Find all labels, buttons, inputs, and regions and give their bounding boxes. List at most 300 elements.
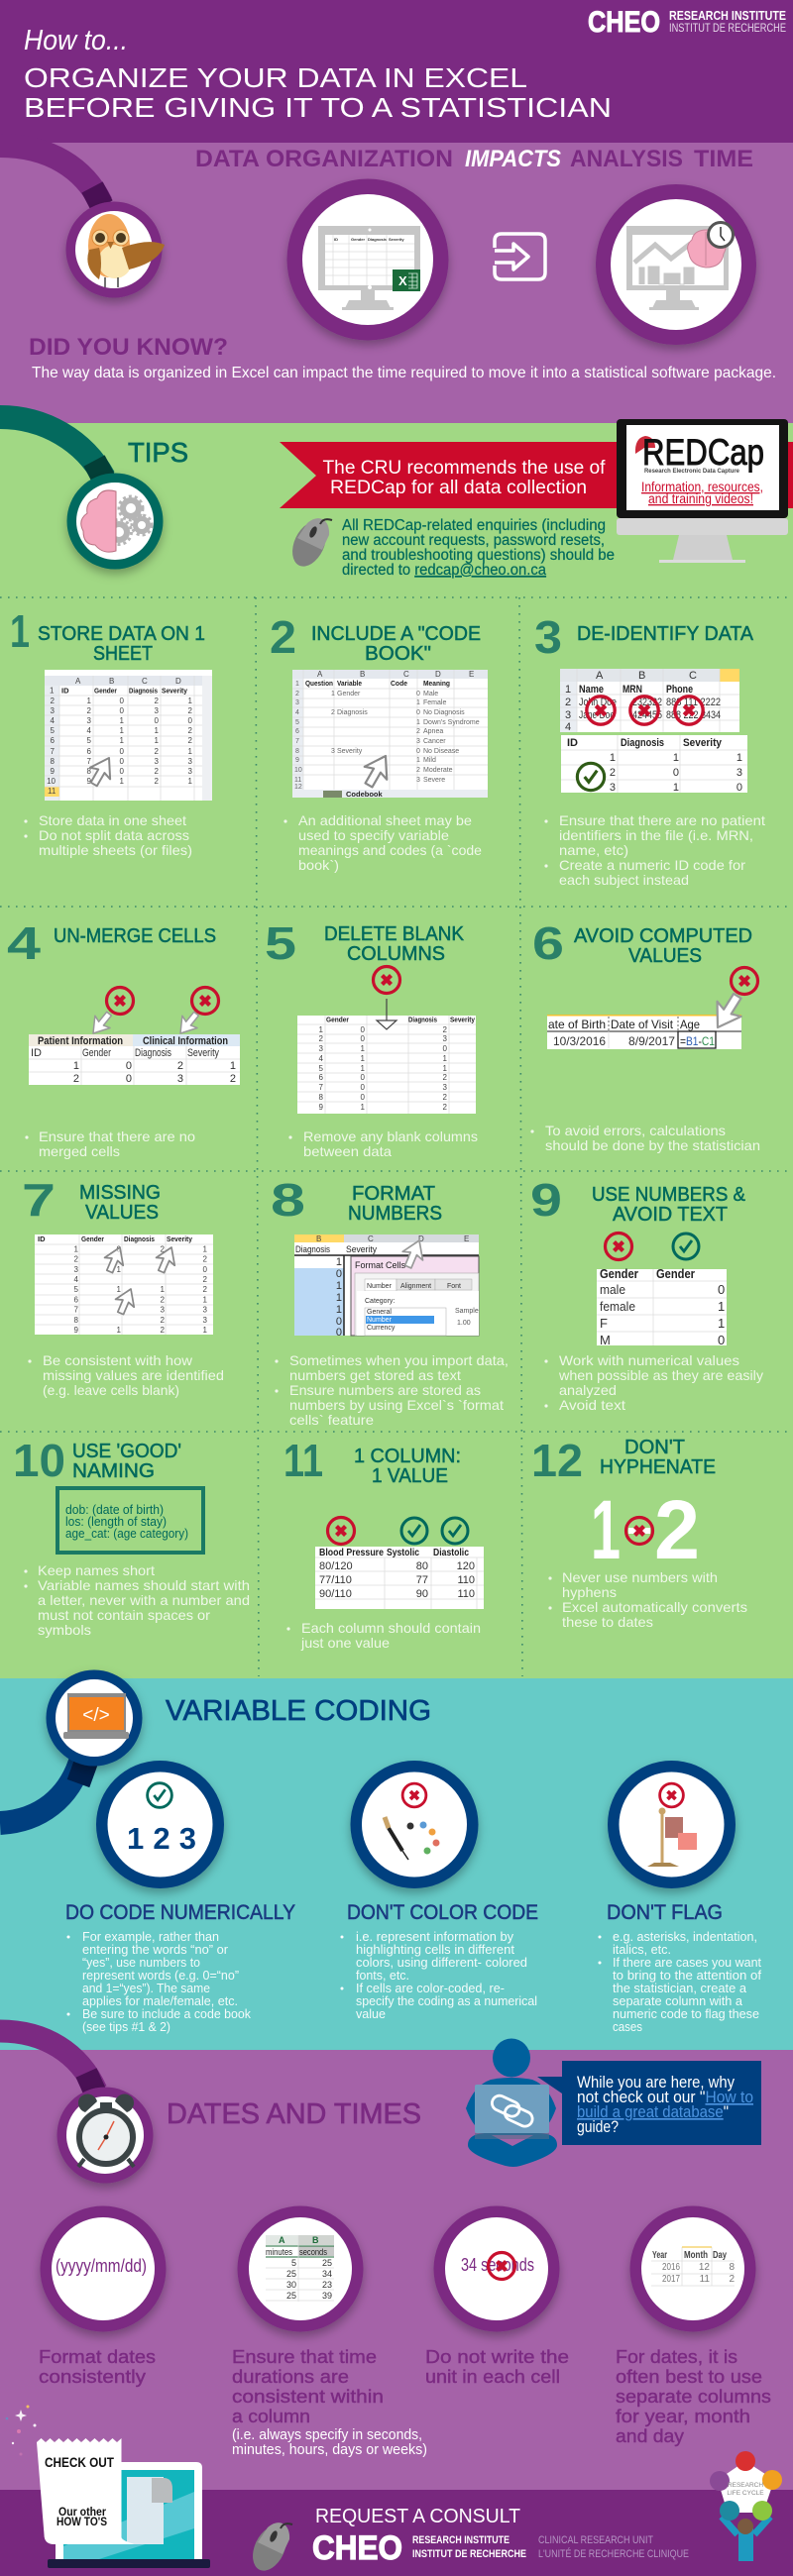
- bullet list: value: [356, 2006, 386, 2021]
- heading: NAMING: [72, 1459, 155, 1482]
- icon: circle minutes and seconds table: 34: [322, 2269, 332, 2279]
- bullet list: [599, 1929, 761, 2034]
- heading: BOOK": [365, 642, 431, 665]
- icon: circle minutes and seconds table: B: [312, 2235, 319, 2245]
- bullet list: Never use numbers with: [562, 1569, 718, 1585]
- number 9: 9: [530, 1174, 562, 1226]
- code book screenshot: 3: [295, 699, 299, 706]
- text: do not write the unit: [425, 2346, 569, 2387]
- text versus number table: 0: [718, 1333, 725, 1347]
- heading: [324, 922, 464, 965]
- bullet list: fonts, etc.: [356, 1968, 409, 1983]
- bullet list: Excel automatically converts: [562, 1599, 747, 1615]
- de-identified data table: Diagnosis: [621, 737, 664, 749]
- code book screenshot: Gender: [337, 691, 361, 698]
- panel: tip 8 format numbers: [271, 1174, 509, 1428]
- text: time durations: minutes, hours, days or weeks): [232, 2441, 427, 2458]
- text: format dates consistently: [39, 2346, 156, 2387]
- logo: footer CHEO and clinical research unit: RESEARCH INSTITUTE: [412, 2534, 510, 2546]
- icon: circle with monitor showing spreadsheet: [287, 178, 448, 341]
- code book screenshot: 2: [416, 728, 420, 735]
- table with missing values: Gender: [81, 1234, 104, 1243]
- code book screenshot: 7: [295, 738, 299, 745]
- bullet list: Ensure that there are no: [39, 1128, 195, 1144]
- format cells screenshot: 0: [336, 1268, 342, 1280]
- callout: database guide: not check out our "How to: [577, 2089, 753, 2106]
- table with blank column: Gender: [326, 1015, 349, 1024]
- code book screenshot: 1: [416, 719, 420, 726]
- text versus number table: female: [600, 1299, 635, 1314]
- code book screenshot: Cancer: [423, 738, 446, 745]
- column: don't color code: [341, 1901, 538, 2021]
- blood pressure table: 80: [416, 1560, 428, 1572]
- blood pressure table: 90/110: [319, 1588, 352, 1600]
- bullet list: the statistician, create a: [613, 1981, 747, 1995]
- heading: [354, 1445, 461, 1487]
- spreadsheet screenshot: 98023: [51, 767, 193, 776]
- bullet list: i.e. represent information by: [356, 1929, 513, 1944]
- panel: tip 3 de-identify data: [534, 611, 765, 888]
- icon: circle minutes and seconds table: 25: [286, 2269, 296, 2279]
- icon: laptop with check out how-to's scroll: CHECK OUT: [45, 2454, 114, 2470]
- icon: magnifier with brain and gears: [0, 417, 163, 569]
- heading: [79, 1181, 161, 1224]
- bullet list: italics, etc.: [613, 1942, 671, 1957]
- icon: monitor with REDCap link: Research Electronic Data Capture: [644, 468, 739, 475]
- header band: [0, 0, 793, 143]
- bullet list: If cells are color-coded, re-: [356, 1981, 505, 1995]
- blood pressure table: 80/120: [319, 1560, 353, 1572]
- icon: circle minutes and seconds table: 30: [286, 2280, 296, 2290]
- bullet list: [548, 1569, 747, 1630]
- identifiable data table: Name: [579, 684, 604, 696]
- spreadsheet screenshot: 9: [87, 777, 92, 786]
- icon: circle do code numerically: 1 2 3: [127, 1821, 196, 1856]
- text versus number table: F: [600, 1316, 608, 1331]
- icon: circle minutes and seconds table: [238, 2205, 363, 2332]
- table with missing values: 823: [74, 1316, 208, 1325]
- table with blank column: 511: [319, 1064, 448, 1073]
- code book screenshot: 6: [295, 728, 299, 735]
- text: separate columns for dates: for year, month: [616, 2406, 750, 2426]
- panel: tip 6 avoid computed values: [530, 917, 760, 1153]
- table with missing values: Severity: [167, 1234, 193, 1243]
- table with blank column: 602: [319, 1073, 448, 1082]
- code book screenshot: 8: [295, 748, 299, 755]
- bullet list: For example, rather than: [82, 1929, 219, 1944]
- callout: database guide: While you are here, why: [577, 2074, 736, 2092]
- code book screenshot: C: [403, 670, 409, 679]
- bullet list: [24, 812, 192, 858]
- logo: footer CHEO and clinical research unit: CLINICAL RESEARCH UNIT: [538, 2534, 653, 2546]
- logo: CHEO research institute: [588, 6, 786, 39]
- bullet list: Do not split data across: [39, 827, 189, 843]
- heading: variable coding: VARIABLE CODING: [166, 1695, 431, 1727]
- bullet list: must not contain spaces or: [38, 1607, 210, 1623]
- icon: computer mouse: [246, 2521, 293, 2576]
- column: don't flag: [599, 1901, 761, 2034]
- formula table: 8/9/2017: [628, 1034, 675, 1048]
- banner: CRU recommendation: REDCap for all data collection: [330, 478, 587, 498]
- bullet list: represent words (e.g. 0=“no”: [82, 1968, 239, 1983]
- code book screenshot: Codebook: [346, 790, 383, 799]
- formula table: 10/3/2016: [553, 1034, 606, 1048]
- panel: tip 7 missing values: [22, 1174, 224, 1398]
- text: time durations: Ensure that time: [232, 2346, 377, 2367]
- format cells screenshot: Category:: [365, 1298, 395, 1305]
- icon: circle minutes and seconds table: 25: [322, 2258, 332, 2268]
- heading: AVOID TEXT: [613, 1203, 728, 1226]
- icon: circle minutes and seconds table: A: [279, 2235, 285, 2245]
- text: time durations: [232, 2346, 427, 2458]
- bullet list: Ensure numbers are stored as: [289, 1382, 481, 1398]
- code book screenshot: 1: [416, 699, 420, 706]
- table with missing values: Diagnosis: [124, 1234, 155, 1243]
- panel background: did you know: [0, 143, 793, 423]
- heading: data organization impacts analysis time: IMPACTS: [465, 146, 561, 172]
- blood pressure table: 120: [457, 1560, 475, 1572]
- bullet list: numbers by using Excel`s `format: [289, 1397, 504, 1413]
- title: ORGANIZE YOUR DATA IN EXCEL: [24, 62, 527, 93]
- bullet list: Store data in one sheet: [39, 812, 186, 828]
- code book screenshot: 0: [416, 748, 420, 755]
- code book screenshot: Down's Syndrome: [423, 719, 480, 726]
- bullet list: To avoid errors, calculations: [545, 1123, 726, 1138]
- banner: CRU recommendation: The CRU recommends the use of: [323, 458, 606, 479]
- code book screenshot: Female: [423, 699, 446, 706]
- heading: DE-IDENTIFY DATA: [577, 622, 753, 645]
- text: REDCap enquiries: [342, 517, 615, 579]
- number 12: 12: [531, 1435, 583, 1486]
- table with missing values: [35, 1234, 213, 1335]
- format cells screenshot: [294, 1234, 479, 1339]
- panel: tip 10 use good naming: [13, 1435, 250, 1638]
- spreadsheet screenshot: 2: [155, 777, 160, 786]
- spreadsheet screenshot: 11: [48, 787, 57, 796]
- bullet list: each subject instead: [559, 872, 689, 888]
- format cells screenshot: 1: [336, 1256, 342, 1268]
- formula table: ate of Birth: [548, 1018, 606, 1031]
- bullet list: An additional sheet may be: [298, 812, 472, 828]
- format cells screenshot: 1: [336, 1280, 342, 1292]
- heading: [38, 622, 205, 665]
- heading: INCLUDE A "CODE: [311, 622, 481, 645]
- heading: VALUES: [85, 1201, 159, 1224]
- icon: research life cycle: RESEARCH: [728, 2482, 763, 2489]
- identifiable data table: A: [596, 670, 604, 682]
- bullet list: applies for male/female, etc.: [82, 1993, 238, 2008]
- merged cell table with warnings: Clinical Information: [143, 1035, 228, 1047]
- text: format dates consistently: consistently: [39, 2366, 147, 2387]
- spreadsheet screenshot: A: [75, 677, 81, 686]
- text: did you know sentence: The way data is organized in Excel can impact the time required to move it into a statistical software package.: [32, 365, 776, 381]
- identifiable data table: C: [689, 670, 697, 682]
- bullet list: e.g. asterisks, indentation,: [613, 1929, 757, 1944]
- naming examples box: age_cat: (age category): [65, 1526, 188, 1541]
- text versus number table: Gender: [600, 1266, 638, 1281]
- code book screenshot: 5: [295, 719, 299, 726]
- heading: STORE DATA ON 1: [38, 622, 205, 645]
- blood pressure table: Systolic: [387, 1547, 419, 1558]
- text: separate columns for dates: [616, 2346, 771, 2446]
- table with missing values: 1021: [74, 1244, 208, 1254]
- merged cell table with warnings: 1021: [73, 1060, 236, 1072]
- number 4: 4: [7, 917, 42, 969]
- code book screenshot: E: [469, 670, 474, 679]
- table with blank column: 411: [319, 1054, 448, 1063]
- bullet list: colors, using different- colored: [356, 1955, 527, 1970]
- icon: circle year month day table: Day: [713, 2250, 727, 2261]
- code book screenshot: 3: [331, 748, 335, 755]
- text versus number table: Gender: [656, 1266, 695, 1281]
- identifiable data table: MRN: [623, 684, 642, 696]
- table with blank column: 802: [319, 1093, 448, 1102]
- format cells screenshot: Format Cells: [355, 1260, 406, 1270]
- code book screenshot: Code: [391, 679, 407, 688]
- bullet list: cases: [613, 2019, 642, 2034]
- bullet list: specify the coding as a numerical: [356, 1993, 537, 2008]
- bullet list: book`): [298, 857, 339, 873]
- table with missing values: 621: [74, 1296, 208, 1304]
- number 5: 5: [265, 917, 296, 969]
- heading: USE NUMBERS &: [592, 1183, 745, 1206]
- bullet list: highlighting cells in different: [356, 1942, 514, 1957]
- table with blank column: [297, 967, 476, 1114]
- heading: DELETE BLANK: [324, 922, 464, 945]
- icon: circle 34 seconds crossed out: 34 seconds: [461, 2255, 534, 2275]
- table with missing values: 733: [74, 1306, 208, 1314]
- bullet list: Remove any blank columns: [303, 1128, 478, 1144]
- spreadsheet screenshot: 32032: [51, 706, 193, 715]
- bullet list: [544, 812, 765, 888]
- table with missing values: 9121: [74, 1326, 208, 1335]
- heading: data organization impacts analysis time: DATA ORGANIZATION: [195, 146, 453, 172]
- spreadsheet screenshot: 1: [120, 777, 125, 786]
- bullet list: (e.g. leave cells blank): [43, 1382, 179, 1398]
- code book screenshot: Diagnosis: [337, 709, 368, 716]
- text: time durations: consistent within: [232, 2386, 384, 2407]
- heading: DON'T COLOR CODE: [347, 1901, 538, 1924]
- heading: [348, 1182, 442, 1225]
- de-identified data table: 310: [610, 782, 742, 794]
- bullet list: used to specify variable: [298, 827, 449, 843]
- icon: circle year month day table: 2016: [662, 2262, 680, 2273]
- heading: COLUMNS: [347, 942, 445, 965]
- panel: tip 5 delete blank columns: [265, 917, 478, 1159]
- text: time durations: (i.e. always specify in seconds,: [232, 2426, 422, 2443]
- format cells screenshot: Currency: [367, 1325, 396, 1332]
- naming examples box: dob: (date of birth): [65, 1502, 164, 1517]
- code book screenshot: [292, 670, 488, 799]
- number 2: 2: [270, 611, 296, 663]
- bullet list: [67, 1929, 251, 2034]
- code book screenshot: No Diagnosis: [423, 709, 465, 716]
- bullet list: to bring to the attention of: [613, 1968, 761, 1983]
- table with missing values: 310: [74, 1265, 208, 1274]
- code book screenshot: 1: [295, 681, 299, 688]
- formula table: =B1-C1: [680, 1034, 715, 1048]
- formula table: Date of Visit: [611, 1018, 674, 1031]
- icon: magnifier with alarm clock: [0, 2031, 153, 2184]
- heading: [592, 1183, 745, 1226]
- de-identified data table: Severity: [683, 737, 723, 749]
- heading: [600, 1436, 716, 1478]
- panel: tip 1 store data on 1 sheet: [10, 605, 212, 858]
- code book screenshot: Severe: [423, 777, 445, 784]
- identifiable data table: [560, 669, 739, 733]
- heading: HYPHENATE: [600, 1455, 716, 1478]
- bullet list: Be consistent with how: [43, 1352, 193, 1368]
- spreadsheet screenshot: 1: [50, 686, 55, 696]
- spreadsheet screenshot: [45, 670, 212, 801]
- bullet list: (see tips #1 & 2): [82, 2019, 170, 2034]
- code book screenshot: D: [435, 670, 441, 679]
- panel background: variable coding: [0, 1678, 793, 2050]
- merged cell table with warnings: [29, 987, 240, 1085]
- code book screenshot: 3: [416, 738, 420, 745]
- panel: tip 4 un-merge cells: [7, 917, 240, 1159]
- spreadsheet screenshot: D: [175, 677, 181, 686]
- code book screenshot: Apnea: [423, 728, 443, 735]
- identifiable data table: 888 222 3434: [666, 709, 721, 721]
- bullet list: Sometimes when you import data,: [289, 1352, 509, 1368]
- heading: FORMAT: [352, 1182, 435, 1205]
- merged cell table with warnings: ID: [31, 1047, 42, 1059]
- panel background: dates and times: [0, 2050, 793, 2490]
- icon: wrong and right marks: [605, 1233, 699, 1260]
- spreadsheet screenshot: 76021: [51, 747, 193, 756]
- icon: circle don't color code: [351, 1761, 478, 1888]
- callout: database guide: [537, 2061, 761, 2145]
- identifiable data table: 888 111 2222: [666, 697, 721, 708]
- blood pressure table: 77/110: [319, 1574, 352, 1586]
- icon: magnifier with laptop code: [0, 1670, 143, 1823]
- bullet list: entering the words “no” or: [82, 1942, 229, 1957]
- format cells screenshot: 1: [336, 1292, 342, 1304]
- bullet list: numeric code to flag these: [613, 2006, 759, 2021]
- panel background: tips: [0, 423, 793, 1678]
- title: How to...: [24, 25, 128, 56]
- icon: circle minutes and seconds table: 5: [291, 2258, 296, 2268]
- code book screenshot: Moderate: [423, 767, 453, 774]
- icon: circle minutes and seconds table: 39: [322, 2291, 332, 2301]
- bullet list: missing values are identified: [43, 1367, 224, 1383]
- heading: NUMBERS: [348, 1202, 442, 1225]
- bullet list: [544, 1352, 763, 1413]
- text: separate columns for dates: For dates, it is: [616, 2346, 737, 2367]
- naming examples box: los: (length of stay): [65, 1514, 167, 1529]
- identifiable data table: Jane Doe: [579, 709, 615, 721]
- identifiable data table: John Doe: [579, 697, 617, 708]
- logo: footer CHEO and clinical research unit: INSTITUT DE RECHERCHE: [412, 2548, 526, 2560]
- icon: circle year month day table: 8: [729, 2262, 735, 2273]
- merged cell table with warnings: Gender: [82, 1047, 111, 1059]
- bullet list: and 1=“yes”). The same: [82, 1981, 210, 1995]
- logo: footer CHEO and clinical research unit: L'UNITÉ DE RECHERCHE CLINIQUE: [538, 2547, 689, 2560]
- format cells screenshot: D: [418, 1234, 424, 1243]
- code book screenshot: B: [360, 670, 365, 679]
- format cells screenshot: C: [368, 1234, 374, 1243]
- bullet list: [530, 1123, 760, 1153]
- code book screenshot: Meaning: [423, 679, 450, 688]
- bullet list: should be done by the statistician: [545, 1137, 760, 1153]
- code book screenshot: Variable: [337, 679, 362, 688]
- bullet list: cells` feature: [289, 1412, 374, 1428]
- spreadsheet screenshot: C: [142, 677, 148, 686]
- format cells screenshot: Diagnosis: [295, 1244, 330, 1255]
- heading: AVOID COMPUTED: [574, 924, 752, 947]
- icon: circle date format: (yyyy/mm/dd): [56, 2256, 147, 2276]
- icon: circle date format: [40, 2205, 167, 2332]
- icon: laptop with check out how-to's scroll: [6, 2406, 210, 2568]
- table with blank column: Diagnosis: [408, 1015, 437, 1024]
- merged cell table with warnings: 2032: [73, 1073, 236, 1085]
- code book screenshot: Mild: [423, 757, 436, 764]
- icon: monitor with REDCap link: REDCap: [642, 432, 764, 473]
- blood pressure table: Diastolic: [433, 1547, 469, 1558]
- illustration: 1-2 crossed out: [591, 1483, 700, 1576]
- text: REDCap enquiries: new account requests, password resets,: [342, 532, 605, 549]
- heading: UN-MERGE CELLS: [54, 924, 216, 947]
- spreadsheet screenshot: Severity: [162, 686, 188, 696]
- panel: tip 11 one column one value: [283, 1435, 484, 1651]
- bullet list: “yes”, use numbers to: [82, 1955, 200, 1970]
- code book screenshot: 0: [416, 709, 420, 716]
- blood pressure table: 110: [457, 1574, 475, 1586]
- format cells screenshot: 0: [336, 1327, 342, 1339]
- bullet list: these to dates: [562, 1614, 653, 1630]
- formula table: [547, 967, 757, 1049]
- code book screenshot: Question: [305, 679, 333, 688]
- bullet list: [283, 812, 482, 873]
- illustration: 1-2 crossed out: 2: [654, 1483, 700, 1576]
- number 3: 3: [534, 611, 562, 663]
- code book screenshot: 1: [331, 691, 335, 698]
- icon: magnifier with laptop code: </>: [82, 1705, 110, 1726]
- format cells screenshot: Number: [367, 1283, 393, 1290]
- identifiable data table: 1: [565, 684, 571, 696]
- icon: circle year month day table: 2017: [662, 2274, 680, 2285]
- table with blank column: 703: [319, 1083, 448, 1092]
- format cells screenshot: Severity: [346, 1244, 377, 1255]
- bullet list: Each column should contain: [301, 1620, 481, 1636]
- icon: circle 34 seconds crossed out: [434, 2205, 559, 2332]
- bullet list: analyzed: [559, 1382, 617, 1398]
- text: REDCap enquiries: directed to redcap@cheo.on.ca: [342, 562, 546, 579]
- table with blank column: Severity: [450, 1015, 476, 1024]
- format cells screenshot: Font: [447, 1283, 461, 1290]
- arrow: export icon: [495, 234, 545, 279]
- logo: CHEO research institute: CHEO: [588, 6, 660, 39]
- de-identified data table: [561, 735, 747, 794]
- icon: research life cycle: LIFE CYCLE: [727, 2490, 764, 2497]
- bullet list: [25, 1128, 195, 1159]
- number 10: 10: [13, 1435, 65, 1486]
- text: do not write the unit: unit in each cell: [425, 2366, 560, 2387]
- bullet list: Keep names short: [38, 1562, 155, 1578]
- link: request a consult: REQUEST A CONSULT: [315, 2506, 520, 2527]
- code book screenshot: A: [317, 670, 323, 679]
- icon: circle year month day table: 12: [699, 2262, 710, 2273]
- blood pressure table: Blood Pressure: [319, 1547, 384, 1558]
- text: time durations: a column: [232, 2406, 310, 2426]
- heading: MISSING: [79, 1181, 161, 1204]
- bullet list: just one value: [300, 1635, 390, 1651]
- heading: VALUES: [628, 944, 702, 967]
- bullet list: separate column with a: [613, 1993, 743, 2008]
- bullet list: [24, 1562, 250, 1638]
- heading: 1 VALUE: [372, 1464, 448, 1487]
